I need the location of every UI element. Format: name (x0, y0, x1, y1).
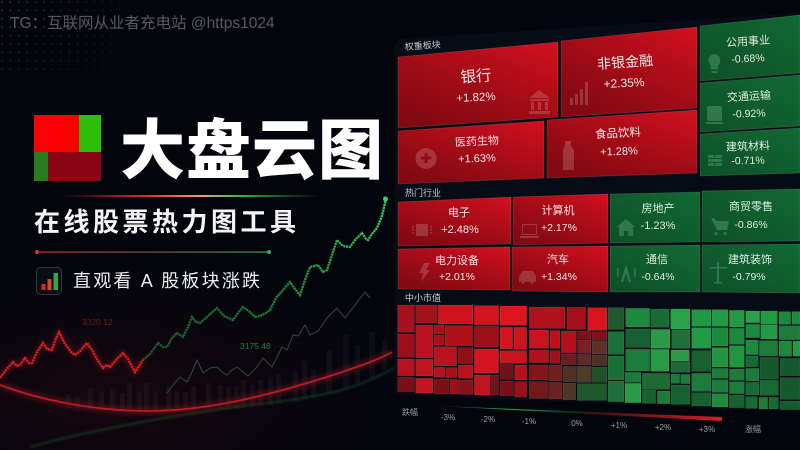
red curve (0, 352, 392, 411)
panel: heat map dashboard (395, 13, 800, 412)
cell: 医药生物 (398, 121, 544, 184)
section label: 热门行业: 热门行业 (405, 187, 441, 198)
legend (402, 406, 761, 434)
cell: 医药生物: +1.63% (458, 152, 496, 166)
cell: 房地产: 房地产 (642, 201, 674, 215)
cell: 医药生物: 医药生物 (455, 133, 499, 149)
cell: 通信: 通信 (646, 253, 668, 266)
cell: 商贸零售: -0.86% (734, 219, 768, 231)
divider line with dots (35, 250, 271, 254)
cell: 公用事业: -0.68% (731, 52, 765, 66)
chart: market lines (0, 196, 395, 447)
cell: 房地产 (610, 192, 700, 243)
cell: 非银金融: 非银金融 (597, 52, 653, 72)
cell: 建筑材料: 建筑材料 (726, 138, 770, 154)
cell: 非银金融: +2.35% (603, 75, 645, 91)
cell: 食品饮料: +1.28% (600, 145, 638, 159)
cell: 建筑装饰 (702, 244, 800, 293)
cell: 建筑装饰: 建筑装饰 (728, 252, 772, 266)
legend labels: -2% (481, 415, 495, 424)
cell: 电力设备: 电力设备 (435, 253, 479, 267)
legend labels: +1% (611, 421, 627, 430)
cell: 计算机: 计算机 (542, 203, 574, 217)
legend labels: 0% (571, 419, 583, 428)
legend labels: +2% (655, 423, 671, 432)
cell: 电子: 电子 (448, 206, 470, 219)
cell: 电子: +2.48% (441, 224, 479, 236)
cell: 交通运输: -0.92% (732, 107, 766, 121)
cell: 商贸零售: 商贸零售 (729, 199, 773, 213)
cell: 通信 (610, 245, 700, 292)
cell: 汽车: 汽车 (547, 252, 569, 266)
cell: 银行: +1.82% (456, 91, 496, 105)
label: 3175.48: 3175.48 (240, 341, 271, 351)
cell: 房地产: -1.23% (641, 220, 676, 232)
red zigzag (0, 332, 143, 378)
cell: 银行: 银行 (460, 66, 492, 87)
cell: 汽车: +1.34% (541, 271, 577, 283)
cell: 交通运输 (700, 75, 800, 132)
grey-green line (167, 292, 370, 393)
cell: 计算机: +2.17% (541, 222, 577, 234)
cell: 非银金融 (561, 27, 697, 117)
legend labels (402, 407, 761, 434)
cell: 电子 (398, 197, 511, 246)
cell: 食品饮料 (547, 110, 697, 178)
legend labels: +3% (699, 425, 715, 434)
cell: 公用事业: 公用事业 (726, 33, 770, 50)
cell: 电力设备: +2.01% (439, 271, 475, 283)
legend labels: -1% (522, 417, 536, 426)
legend labels: 涨幅 (745, 424, 761, 434)
treemap: small and mid caps (398, 305, 800, 410)
legend labels: 跌幅 (402, 407, 418, 417)
cell: 建筑材料: -0.71% (731, 155, 765, 167)
bottom green curve (30, 368, 395, 447)
cell: 通信: -0.64% (641, 271, 675, 283)
section label: 权重板块: 权重板块 (404, 39, 441, 52)
top glow line (60, 195, 320, 197)
section label: 中小市值: 中小市值 (405, 292, 441, 303)
volume bars (66, 332, 387, 411)
panel: 权重板块 cells (398, 15, 800, 184)
cell: 商贸零售 (702, 189, 800, 242)
cell: 汽车 (512, 246, 608, 292)
tagline: 直观看 A 股板块涨跌 (73, 271, 262, 291)
cell: 食品饮料: 食品饮料 (595, 125, 642, 141)
cell: 交通运输: 交通运输 (727, 88, 771, 104)
cell: 建筑装饰: -0.79% (732, 271, 766, 283)
subtitle: 在线股票热力图工具 (34, 207, 300, 237)
label: 3320.12: 3320.12 (82, 317, 113, 327)
cell: 电力设备 (398, 247, 510, 290)
cell: 银行 (398, 42, 558, 128)
cell: 计算机 (513, 194, 608, 245)
legend gradient bar (437, 406, 722, 421)
watermark: TG：互联网从业者充电站 @https1024 (10, 14, 275, 32)
title: 大盘云图 (120, 114, 384, 187)
panel: 热门行业 cells (398, 189, 800, 293)
green zigzag (143, 199, 386, 360)
end point (383, 196, 388, 202)
icon: mini bar chart (36, 268, 62, 294)
legend labels: -3% (441, 413, 455, 422)
cell: 公用事业 (700, 15, 800, 81)
logo icon (34, 115, 101, 181)
cell: 建筑材料 (700, 128, 800, 176)
